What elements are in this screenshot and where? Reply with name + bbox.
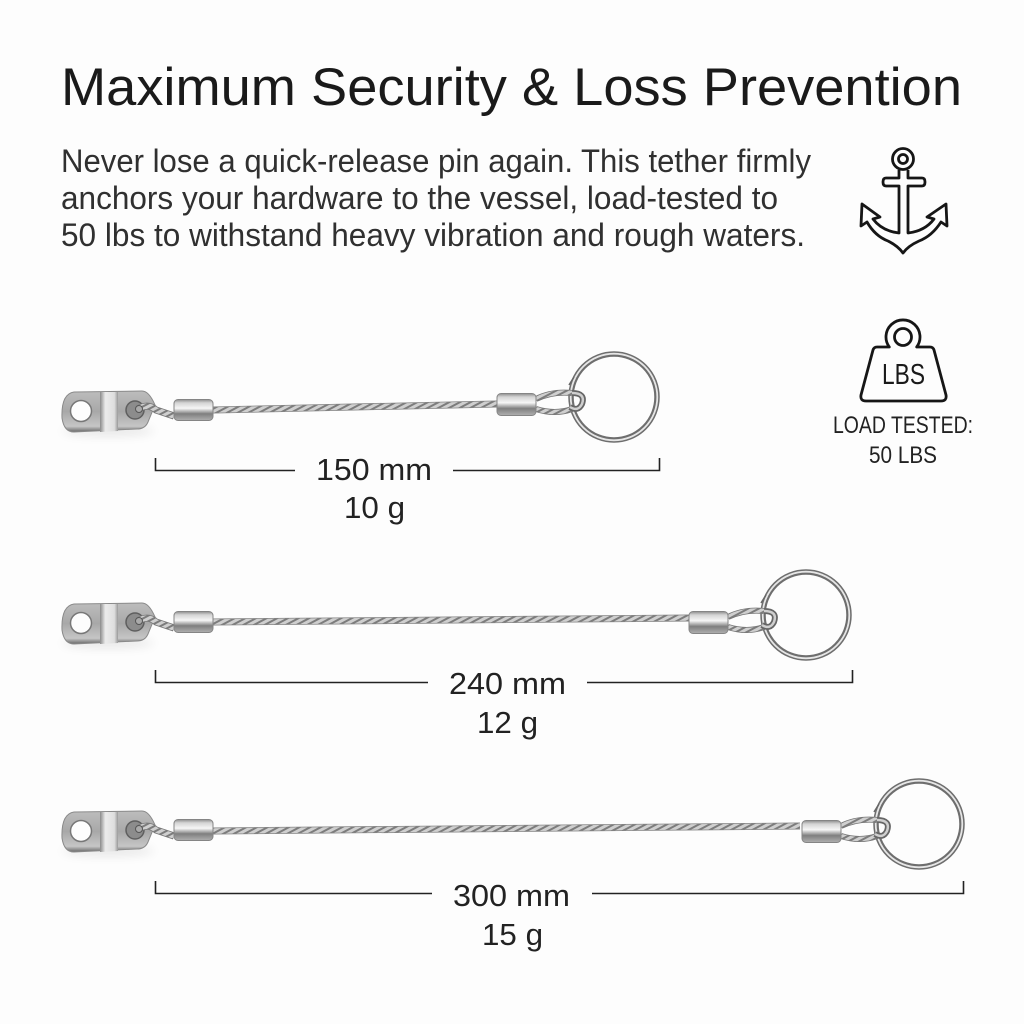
load tested label: 50 LBS: [869, 442, 937, 469]
tether: 300 mm: [62, 781, 962, 867]
intro text block: [61, 143, 811, 253]
intro text block: anchors your hardware to the vessel, load-tested to: [61, 180, 778, 216]
dimension: 240 mm, 12 g: [156, 666, 852, 740]
dimension: 240 mm, 12 g: 12 g: [477, 705, 538, 740]
dimension: 240 mm, 12 g: 240 mm: [449, 666, 566, 701]
dimension: 150 mm, 10 g: 10 g: [344, 490, 405, 525]
dimension: 150 mm, 10 g: [156, 452, 660, 525]
icon: anchor: [861, 148, 947, 253]
dimension: 300 mm, 15 g: 300 mm: [453, 878, 570, 913]
dimension: 300 mm, 15 g: 15 g: [482, 917, 543, 952]
tether: 150 mm: [62, 354, 657, 440]
intro text block: 50 lbs to withstand heavy vibration and rough waters.: [61, 217, 805, 253]
load tested label: LOAD TESTED:: [833, 412, 973, 439]
intro text block: Never lose a quick-release pin again. This tether firmly: [61, 143, 811, 179]
icon: LBS weight: LBS: [882, 359, 925, 391]
title: Maximum Security & Loss Prevention: [61, 58, 962, 117]
tether: 240 mm: [62, 572, 849, 658]
load tested label: [833, 412, 973, 469]
dimension: 300 mm, 15 g: [156, 878, 964, 952]
dimension: 150 mm, 10 g: 150 mm: [316, 452, 432, 487]
icon: LBS weight: [861, 320, 946, 401]
